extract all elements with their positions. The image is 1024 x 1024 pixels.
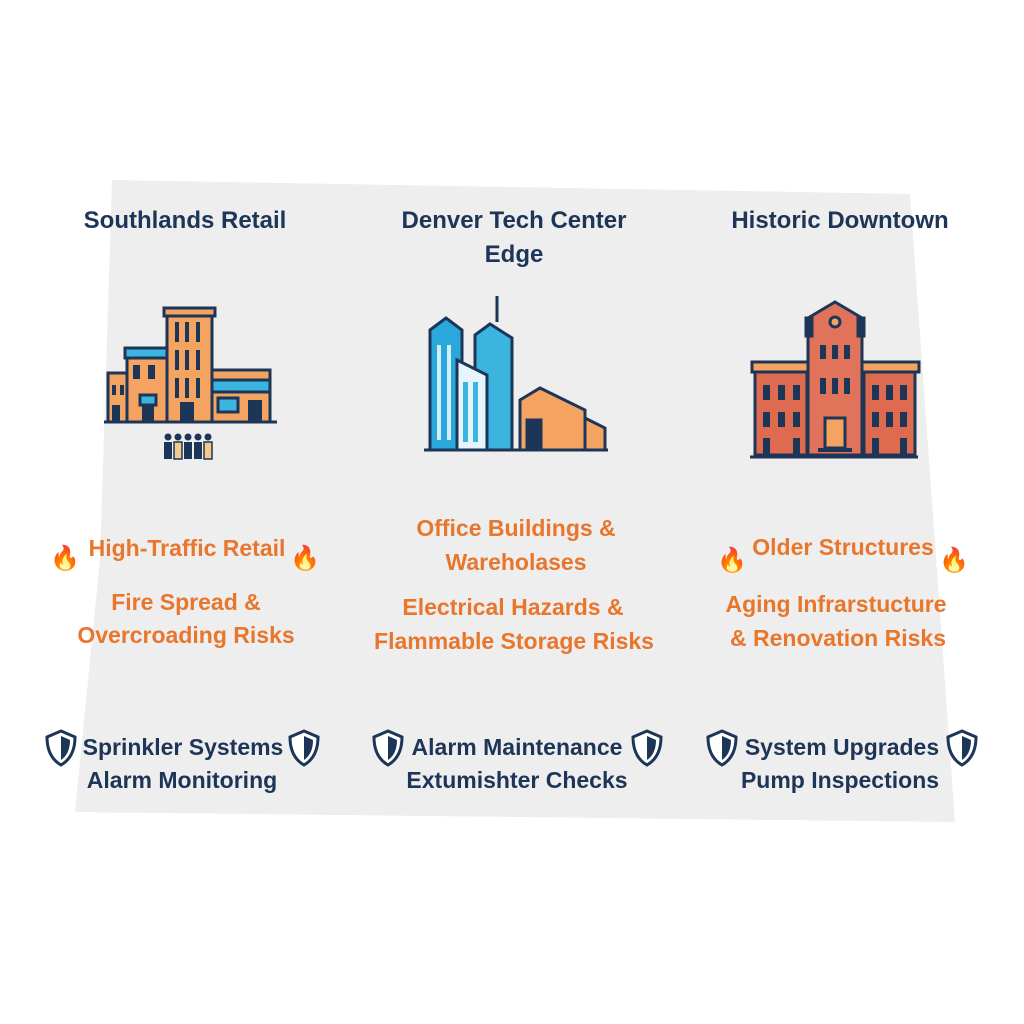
protection text (406, 734, 628, 793)
risk text: & Renovation Risks (730, 625, 946, 651)
heading: Southlands Retail: Southlands Retail (84, 207, 286, 234)
column: Denver Tech Center Edge (374, 207, 654, 793)
heading: Historic Downtown: Historic Downtown (731, 207, 949, 234)
risk text: Flammable Storage Risks (374, 628, 654, 654)
icon: retail buildings (104, 308, 277, 422)
protection text: System Upgrades (745, 734, 939, 760)
risk text (717, 534, 969, 651)
icon: office towers and warehouse (424, 296, 608, 450)
icons: shields (47, 731, 976, 765)
risk text: 🔥 (290, 544, 320, 572)
protection text: Alarm Monitoring (87, 767, 277, 793)
risk text: Older Structures (752, 534, 934, 560)
column: Southlands Retail (50, 207, 320, 793)
risk text (374, 515, 654, 654)
risk text: Aging Infrarstucture (725, 591, 947, 617)
protection text (741, 734, 939, 793)
risk text: Office Buildings & (416, 515, 616, 541)
map background panel (75, 180, 955, 822)
risk text: 🔥 (717, 546, 747, 574)
protection text (83, 734, 283, 793)
risk text: Electrical Hazards & (402, 594, 624, 620)
risk text: High-Traffic Retail (89, 535, 285, 561)
protection text: Alarm Maintenance (412, 734, 622, 760)
heading: Denver Tech Center Edge: Denver Tech Center (402, 207, 626, 234)
protection text: Sprinkler Systems (83, 734, 283, 760)
risk text: 🔥 (939, 546, 969, 574)
risk text: Wareholases (445, 549, 587, 575)
risk text: Fire Spread & (111, 589, 261, 615)
protection text: Pump Inspections (741, 767, 939, 793)
protection text: Extumishter Checks (406, 767, 628, 793)
column: Historic Downtown (717, 207, 969, 793)
risk text (50, 535, 320, 648)
column: Denver Tech Center Edge: Edge (485, 241, 543, 268)
icon: crowd (164, 434, 212, 459)
risk text: Overcroading Risks (77, 622, 295, 648)
risk text: 🔥 (50, 544, 80, 572)
icon: historic brick building (750, 302, 919, 457)
